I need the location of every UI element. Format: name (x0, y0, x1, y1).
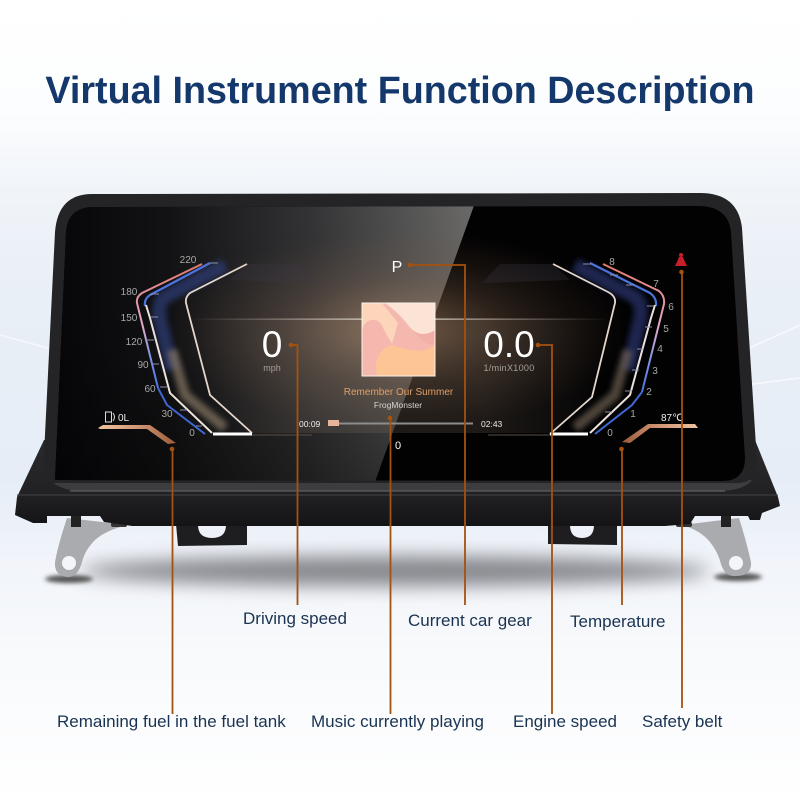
right gauge scale: 8 (609, 257, 615, 268)
head unit base (15, 440, 780, 526)
icon: seat belt warning (675, 253, 687, 266)
right gauge scale: 7 (653, 279, 659, 290)
bottom zero: 0 (395, 440, 401, 452)
right gauge scale: 1 (630, 409, 636, 420)
fuel readout: 0L (118, 413, 130, 424)
screen (40, 200, 760, 490)
fuel readout (98, 412, 176, 444)
right lower tab (548, 524, 617, 545)
music progress bar: 02:43 (481, 419, 503, 429)
leader: temperature (619, 447, 624, 605)
right mounting bracket (676, 515, 751, 576)
leader: safety belt (679, 270, 684, 708)
label: temperature: Temperature (570, 612, 665, 631)
left gauge scale: 0 (189, 428, 195, 439)
label: current car gear: Current car gear (408, 611, 532, 630)
speed readout: mph (263, 363, 281, 373)
engine speed readout: 0.0 (483, 324, 535, 365)
music progress bar: 00:09 (299, 419, 321, 429)
temperature readout: 87℃ (661, 413, 683, 424)
right gauge scale: 2 (646, 387, 652, 398)
leader: engine speed (536, 343, 552, 714)
right gauge scale: 5 (663, 324, 669, 335)
right gauge scale: 3 (652, 366, 658, 377)
left gauge scale: 220 (180, 255, 197, 266)
left gauge (137, 263, 318, 435)
left gauge scale: 180 (121, 287, 138, 298)
labels (57, 609, 723, 731)
left gauge scale: 60 (144, 384, 156, 395)
label: engine speed: Engine speed (513, 712, 617, 731)
left gauge scale: 30 (161, 409, 173, 420)
temperature readout (622, 413, 698, 443)
left gauge scale: 90 (137, 360, 149, 371)
speed readout (263, 331, 281, 373)
left gauge scale: 150 (121, 313, 138, 324)
engine speed readout: 1/minX1000 (483, 363, 535, 373)
label: driving speed: Driving speed (243, 609, 347, 628)
leader: music (388, 416, 392, 714)
monitor frame (44, 193, 757, 483)
bracket shadows (45, 573, 762, 583)
right gauge scale: 4 (657, 344, 663, 355)
right gauge scale: 0 (607, 428, 613, 439)
speed readout: 0 (262, 324, 282, 365)
album art (362, 303, 435, 376)
left gauge scale (121, 255, 197, 439)
left lower tab (176, 524, 247, 546)
left gauge scale: 120 (126, 337, 143, 348)
gear indicator: P (392, 259, 402, 276)
title: Virtual Instrument Function Description (45, 69, 755, 111)
song title: Remember Our Summer (344, 387, 454, 398)
artist: FrogMonster (374, 400, 422, 410)
music progress bar (299, 420, 502, 427)
floor shadow (80, 556, 710, 586)
left mounting bracket (55, 515, 128, 577)
right gauge (482, 263, 664, 435)
label: music: Music currently playing (311, 712, 484, 731)
center glow (208, 247, 600, 414)
right gauge scale (607, 257, 674, 439)
right gauge scale: 6 (668, 302, 674, 313)
label: remaining fuel: Remaining fuel in the fuel tank (57, 712, 286, 731)
label: safety belt: Safety belt (642, 712, 723, 731)
glass reflection (72, 206, 474, 480)
leader: gear (408, 263, 465, 605)
leader: fuel (170, 447, 174, 714)
leader: driving speed (289, 343, 298, 605)
